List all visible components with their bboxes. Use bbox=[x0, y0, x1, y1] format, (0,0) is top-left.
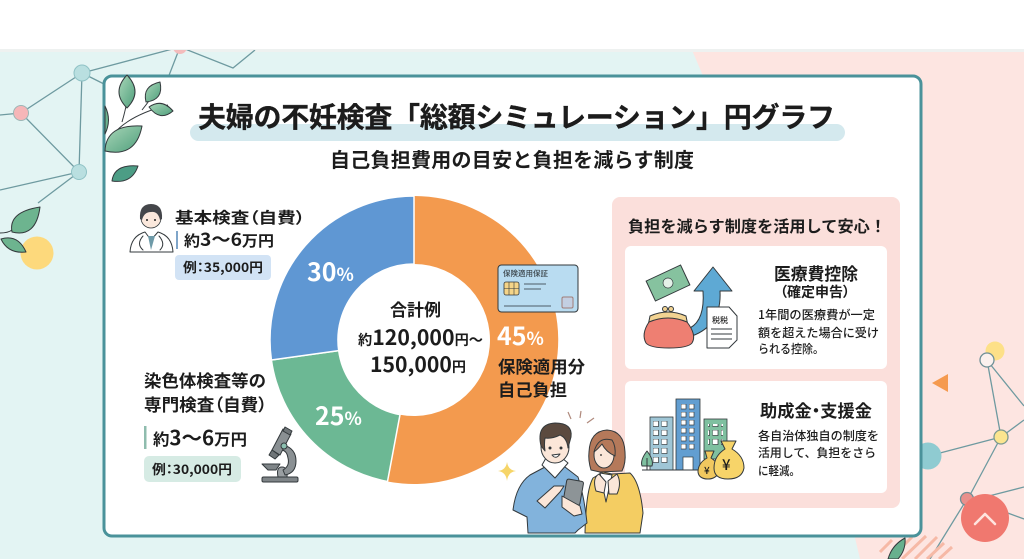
woman face bbox=[600, 454, 602, 456]
sparkle bbox=[498, 462, 516, 481]
card: subsidies bbox=[625, 381, 887, 493]
label: chromosome test: 例：30,000円 bbox=[152, 459, 232, 478]
label: chromosome test bbox=[144, 367, 267, 482]
card: medical deduction bbox=[625, 246, 887, 369]
label: insured share bbox=[498, 353, 585, 401]
network decoration: upper left bbox=[0, 40, 255, 203]
donut centre total: 合計例 bbox=[390, 296, 441, 321]
icon: insurance card: 保険適用保証 bbox=[503, 268, 548, 279]
segment: basic 30% bbox=[270, 196, 414, 360]
woman bbox=[585, 430, 643, 533]
scroll-to-top button bbox=[961, 494, 1009, 542]
label: basic test: 約3〜6万円 bbox=[184, 226, 274, 252]
card: medical deduction: （確定申告） bbox=[780, 282, 850, 302]
donut centre total bbox=[358, 296, 483, 379]
donut centre total: 約120,000円〜 bbox=[358, 322, 483, 352]
icon: buildings and money bags: ¥ bbox=[722, 454, 731, 475]
label: chromosome test: 約3〜6万円 bbox=[153, 422, 247, 451]
man bbox=[513, 423, 587, 533]
icon: insurance card bbox=[498, 265, 578, 312]
card: medical deduction: 額を超えた場合に受け bbox=[758, 324, 879, 341]
subtitle: 自己負担費用の目安と負担を減らす制度 bbox=[330, 144, 694, 173]
orange triangle bbox=[932, 374, 948, 392]
label: basic test: 基本検査（自費） bbox=[175, 206, 305, 228]
label: basic test: 例：35,000円 bbox=[183, 257, 263, 276]
percent label 30: 30% bbox=[307, 253, 354, 289]
icon: buildings and money bags: ¥ bbox=[704, 462, 710, 477]
icon: microscope bbox=[262, 427, 298, 482]
donut centre total: 150,000円 bbox=[370, 349, 466, 379]
icon: money, purse, arrow and document: 税税 bbox=[712, 315, 728, 326]
percent label 45: 45% bbox=[497, 317, 544, 353]
title highlight band bbox=[190, 124, 845, 141]
label: chromosome test: 専門検査（自費） bbox=[144, 391, 267, 416]
segment: insurance 45% bbox=[388, 196, 558, 484]
donut chart bbox=[270, 196, 558, 484]
excitement rays bbox=[568, 411, 594, 423]
card: subsidies: 助成金・支援金 bbox=[760, 397, 872, 422]
hatch stripes bottom right bbox=[880, 536, 952, 559]
illustration: couple with smartphone bbox=[498, 411, 643, 533]
label: basic test bbox=[175, 206, 305, 280]
corner leaves bbox=[105, 75, 173, 181]
card: medical deduction: 医療費控除 bbox=[774, 260, 858, 285]
card: subsidies: に軽減。 bbox=[758, 462, 800, 479]
percent label 25: 25% bbox=[315, 397, 362, 433]
label: insured share: 保険適用分 bbox=[498, 353, 585, 378]
card: medical deduction: 1年間の医療費が一定 bbox=[758, 306, 875, 323]
right panel bbox=[612, 197, 900, 508]
icon: doctor bbox=[130, 204, 173, 252]
bottom right leaf bbox=[888, 538, 905, 559]
card: subsidies: 各自治体独自の制度を bbox=[758, 427, 879, 444]
label: insured share: 自己負担 bbox=[498, 376, 567, 401]
yellow dot and leaves left bbox=[0, 207, 54, 270]
icon: buildings and money bags bbox=[642, 399, 744, 479]
label: chromosome test: 染色体検査等の bbox=[144, 367, 266, 392]
right panel heading: 負担を減らす制度を活用して安心！ bbox=[628, 213, 886, 237]
main panel bbox=[104, 76, 921, 536]
card: medical deduction: られる控除。 bbox=[758, 340, 824, 357]
segment: chromosome 25% bbox=[271, 351, 400, 482]
title: 夫婦の不妊検査「総額シミュレーション」円グラフ bbox=[198, 96, 835, 136]
card: subsidies: 活用して、負担をさら bbox=[758, 444, 876, 461]
network decoration: right bbox=[914, 342, 1024, 559]
icon: money, purse, arrow and document bbox=[644, 265, 737, 348]
